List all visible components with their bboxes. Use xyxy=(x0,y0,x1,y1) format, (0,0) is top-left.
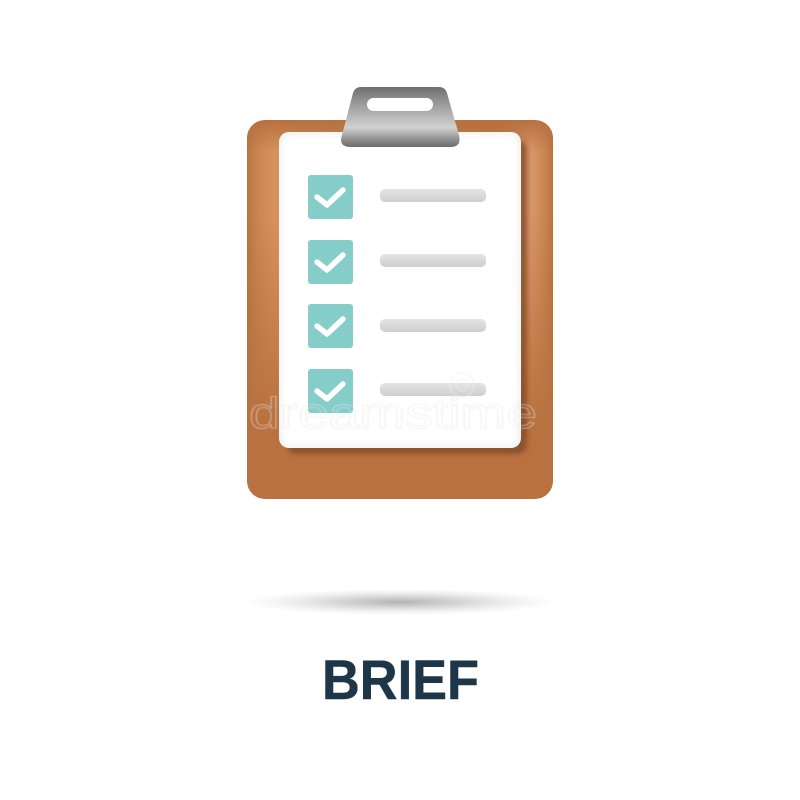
watermark xyxy=(249,373,537,438)
clipboard xyxy=(247,87,553,499)
checklist item 4 xyxy=(308,369,486,413)
checklist item 3 xyxy=(308,304,486,348)
checklist item 1 xyxy=(308,175,486,219)
paper sheet xyxy=(279,132,527,454)
metal clip xyxy=(341,87,460,147)
board xyxy=(247,120,553,499)
watermark: dreamstime xyxy=(249,389,537,438)
title: BRIEF xyxy=(322,648,479,711)
floor shadow xyxy=(245,589,555,615)
infographic: brief clipboard icon xyxy=(247,87,553,700)
checklist item 2 xyxy=(308,240,486,284)
